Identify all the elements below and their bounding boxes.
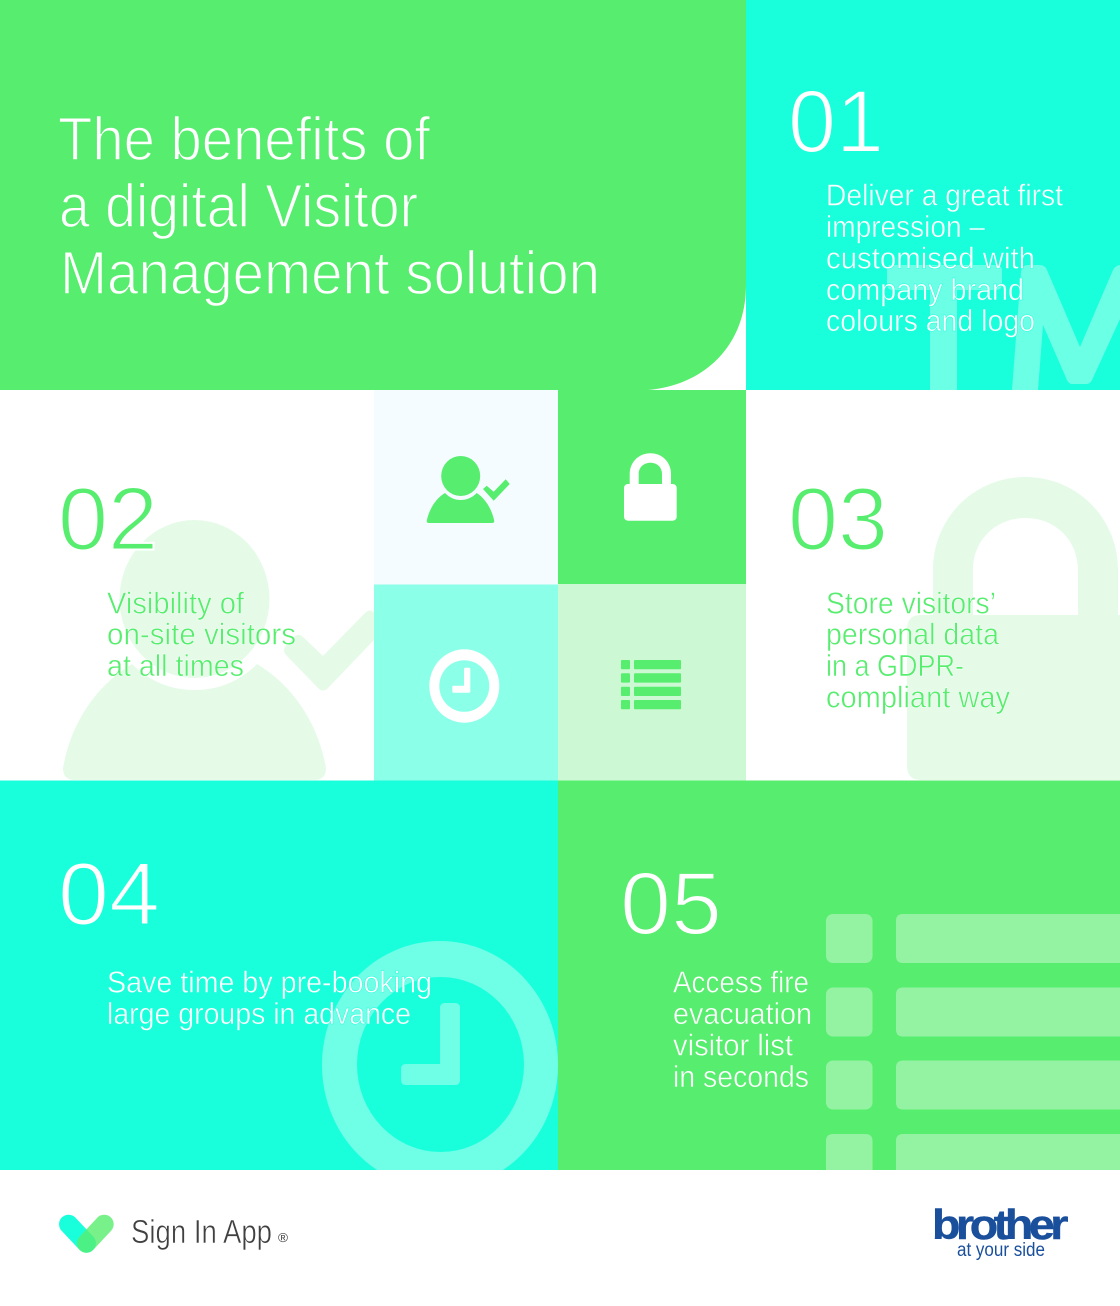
number 01: 01 bbox=[788, 71, 884, 171]
text: benefit 02: at all times bbox=[107, 649, 244, 683]
icon: list bbox=[621, 660, 681, 709]
panel: benefit 05 bbox=[558, 780, 1120, 1170]
logo: brother: brother bbox=[932, 1201, 1068, 1248]
title: The benefits of bbox=[58, 105, 431, 173]
panel: benefit 01 bbox=[746, 0, 1120, 390]
icon: check mark bbox=[68, 1224, 104, 1243]
text: benefit 05: evacuation bbox=[673, 997, 812, 1031]
panel: title header bbox=[0, 0, 746, 390]
panel: lock icon tile bbox=[558, 390, 746, 584]
text: benefit 02: on-site visitors bbox=[107, 618, 296, 652]
panel: benefit 04 bbox=[0, 780, 558, 1170]
number 03: 03 bbox=[788, 468, 888, 568]
text: benefit 01: impression – bbox=[826, 210, 985, 244]
registered mark: ® bbox=[278, 1230, 288, 1245]
icon: person with check bbox=[427, 456, 510, 523]
text: benefit 05 bbox=[673, 966, 812, 1094]
text: benefit 03: personal data bbox=[826, 618, 999, 652]
logo: brother bbox=[932, 1201, 1068, 1261]
panel: benefit 03 bbox=[746, 390, 1120, 780]
logo: Sign In App bbox=[68, 1213, 288, 1250]
text: benefit 03: in a GDPR- bbox=[826, 649, 964, 683]
text: benefit 04 bbox=[107, 966, 432, 1031]
text: benefit 01: Deliver a great first bbox=[826, 178, 1063, 212]
title bbox=[58, 105, 600, 307]
text: benefit 03 bbox=[826, 586, 1011, 714]
watermark: person with check bbox=[63, 520, 374, 780]
text: benefit 04: Save time by pre-booking bbox=[107, 966, 432, 1000]
title: a digital Visitor bbox=[59, 172, 418, 240]
text: benefit 03: compliant way bbox=[826, 680, 1011, 714]
text: benefit 02 bbox=[107, 586, 296, 683]
watermark: padlock bbox=[907, 477, 1120, 780]
text: benefit 01: customised with bbox=[826, 242, 1035, 276]
panel: clock icon tile bbox=[374, 584, 558, 780]
text: benefit 01: colours and logo bbox=[826, 304, 1035, 338]
icon: padlock bbox=[624, 453, 677, 521]
text: benefit 05: visitor list bbox=[673, 1028, 793, 1062]
watermark: clock bbox=[322, 941, 558, 1170]
text: benefit 05: Access fire bbox=[673, 966, 809, 1000]
tagline: at your side bbox=[957, 1240, 1045, 1261]
text: benefit 02: Visibility of bbox=[107, 586, 244, 620]
watermark: TM bbox=[887, 265, 1120, 390]
icon: clock bbox=[429, 649, 499, 723]
number 05: 05 bbox=[620, 853, 722, 953]
number 02: 02 bbox=[58, 468, 158, 568]
number 04: 04 bbox=[58, 844, 160, 944]
text: benefit 04: large groups in advance bbox=[107, 997, 411, 1031]
brand name: Sign In App bbox=[131, 1213, 272, 1250]
text: benefit 05: in seconds bbox=[673, 1060, 809, 1094]
text: benefit 01 bbox=[826, 178, 1063, 338]
text: benefit 03: Store visitors’ bbox=[826, 586, 996, 620]
panel: list icon tile bbox=[558, 584, 746, 780]
title: Management solution bbox=[60, 239, 600, 307]
panel: benefit 02 bbox=[0, 390, 374, 780]
watermark: list bbox=[826, 914, 1120, 1170]
text: benefit 01: company brand bbox=[826, 273, 1024, 307]
panel: person icon tile bbox=[374, 390, 558, 584]
